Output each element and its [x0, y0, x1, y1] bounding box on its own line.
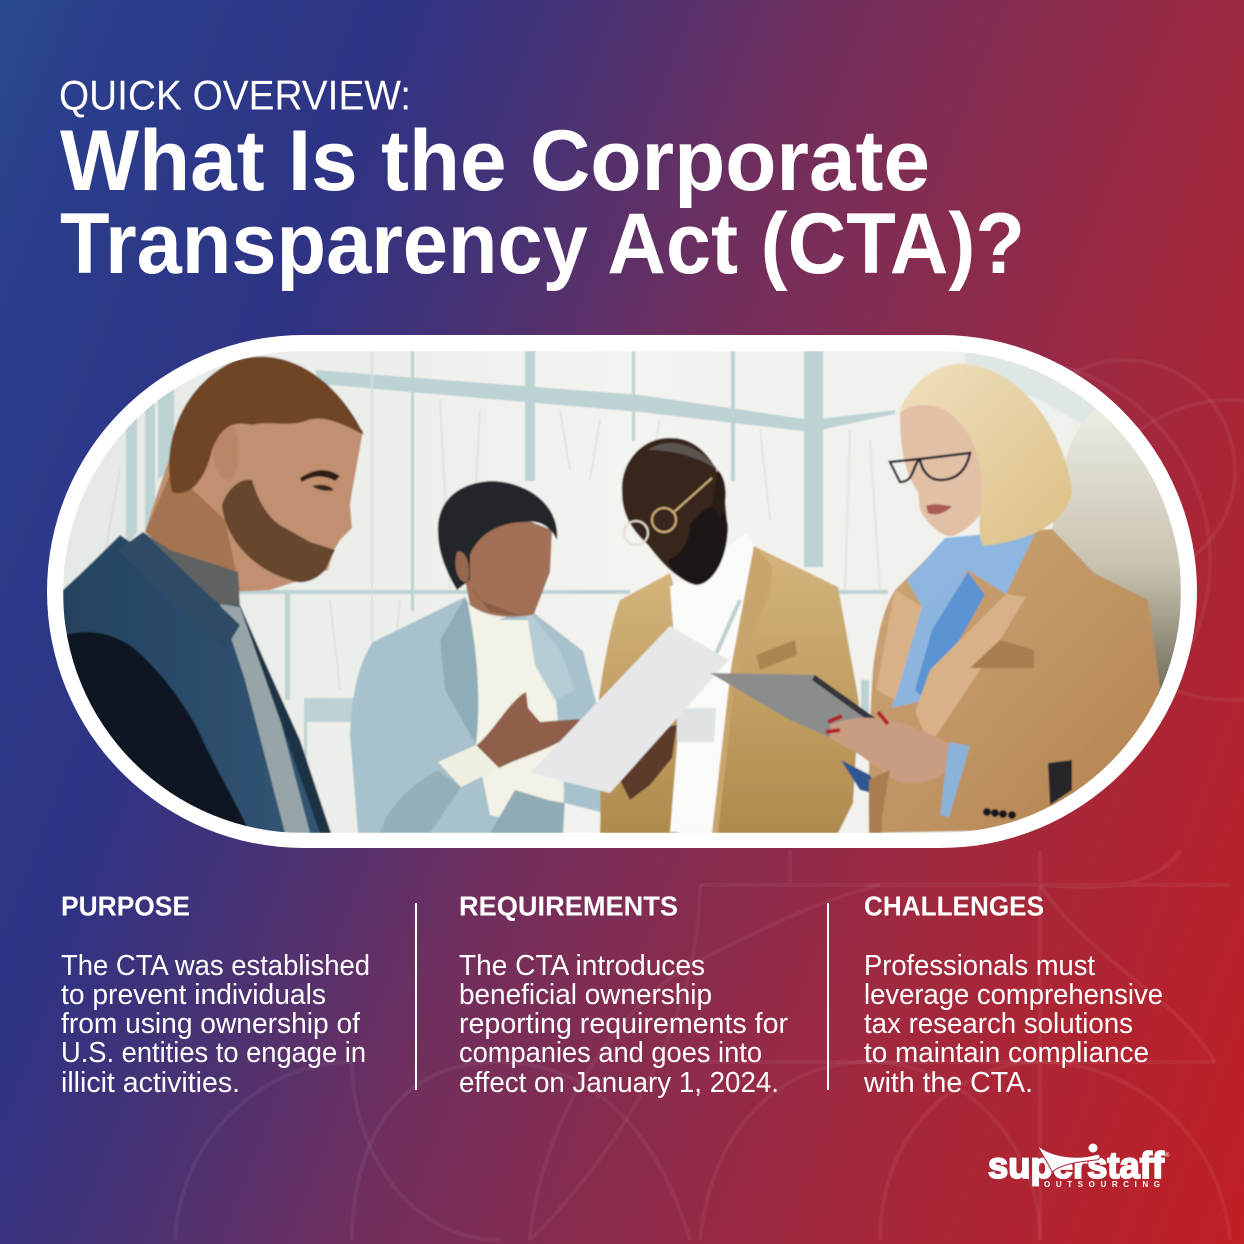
woman with tablet — [710, 364, 1160, 833]
title — [60, 113, 1025, 292]
title: Transparency Act (CTA)? — [60, 196, 1025, 292]
tablet — [710, 672, 865, 738]
challenges body text: to maintain compliance — [864, 1037, 1149, 1069]
man in navy blazer — [63, 356, 364, 833]
challenges body text: Professionals must — [864, 950, 1095, 982]
requirements body text: companies and goes into — [459, 1037, 762, 1069]
logo: superstaff outsourcing: ® — [1165, 1152, 1170, 1159]
requirements body text — [459, 950, 788, 1099]
document held by the group — [530, 626, 729, 793]
challenges body text — [863, 950, 1163, 1099]
column: challenges — [863, 890, 1163, 1099]
chair right — [965, 352, 1172, 526]
requirements body text: effect on January 1, 2024. — [459, 1067, 779, 1099]
purpose body text: from using ownership of — [61, 1008, 361, 1040]
requirements body text: The CTA introduces — [459, 950, 705, 982]
purpose heading: PURPOSE — [61, 890, 190, 922]
requirements body text: beneficial ownership — [459, 979, 712, 1011]
heading: quick overview: QUICK OVERVIEW: — [59, 72, 411, 118]
background watermark pattern — [175, 360, 1244, 1240]
challenges body text: with the CTA. — [863, 1067, 1033, 1099]
requirements body text: reporting requirements for — [459, 1008, 788, 1040]
purpose body text: U.S. entities to engage in — [61, 1037, 366, 1069]
photo frame: white pill — [47, 335, 1197, 848]
purpose body text — [61, 950, 370, 1099]
man in tan jacket — [598, 438, 859, 833]
photo: four colleagues reviewing documents — [63, 351, 1181, 833]
purpose body text: The CTA was established — [61, 950, 370, 982]
window frame — [126, 351, 896, 760]
purpose body text: illicit activities. — [61, 1067, 240, 1099]
woman in pale blue blazer — [350, 480, 602, 833]
challenges body text: tax research solutions — [864, 1008, 1133, 1040]
logo: superstaff outsourcing: OUTSOURCING — [1044, 1180, 1160, 1189]
logo: superstaff outsourcing: superstaff — [988, 1145, 1165, 1186]
requirements heading: REQUIREMENTS — [459, 890, 678, 922]
challenges heading: CHALLENGES — [864, 890, 1044, 922]
column: requirements — [459, 890, 788, 1099]
title: What Is the Corporate — [60, 113, 930, 209]
purpose body text: to prevent individuals — [61, 979, 326, 1011]
faint trees outside the window — [100, 400, 880, 700]
column: purpose — [61, 890, 370, 1099]
challenges body text: leverage comprehensive — [864, 979, 1163, 1011]
logo swoosh — [1037, 1145, 1100, 1172]
